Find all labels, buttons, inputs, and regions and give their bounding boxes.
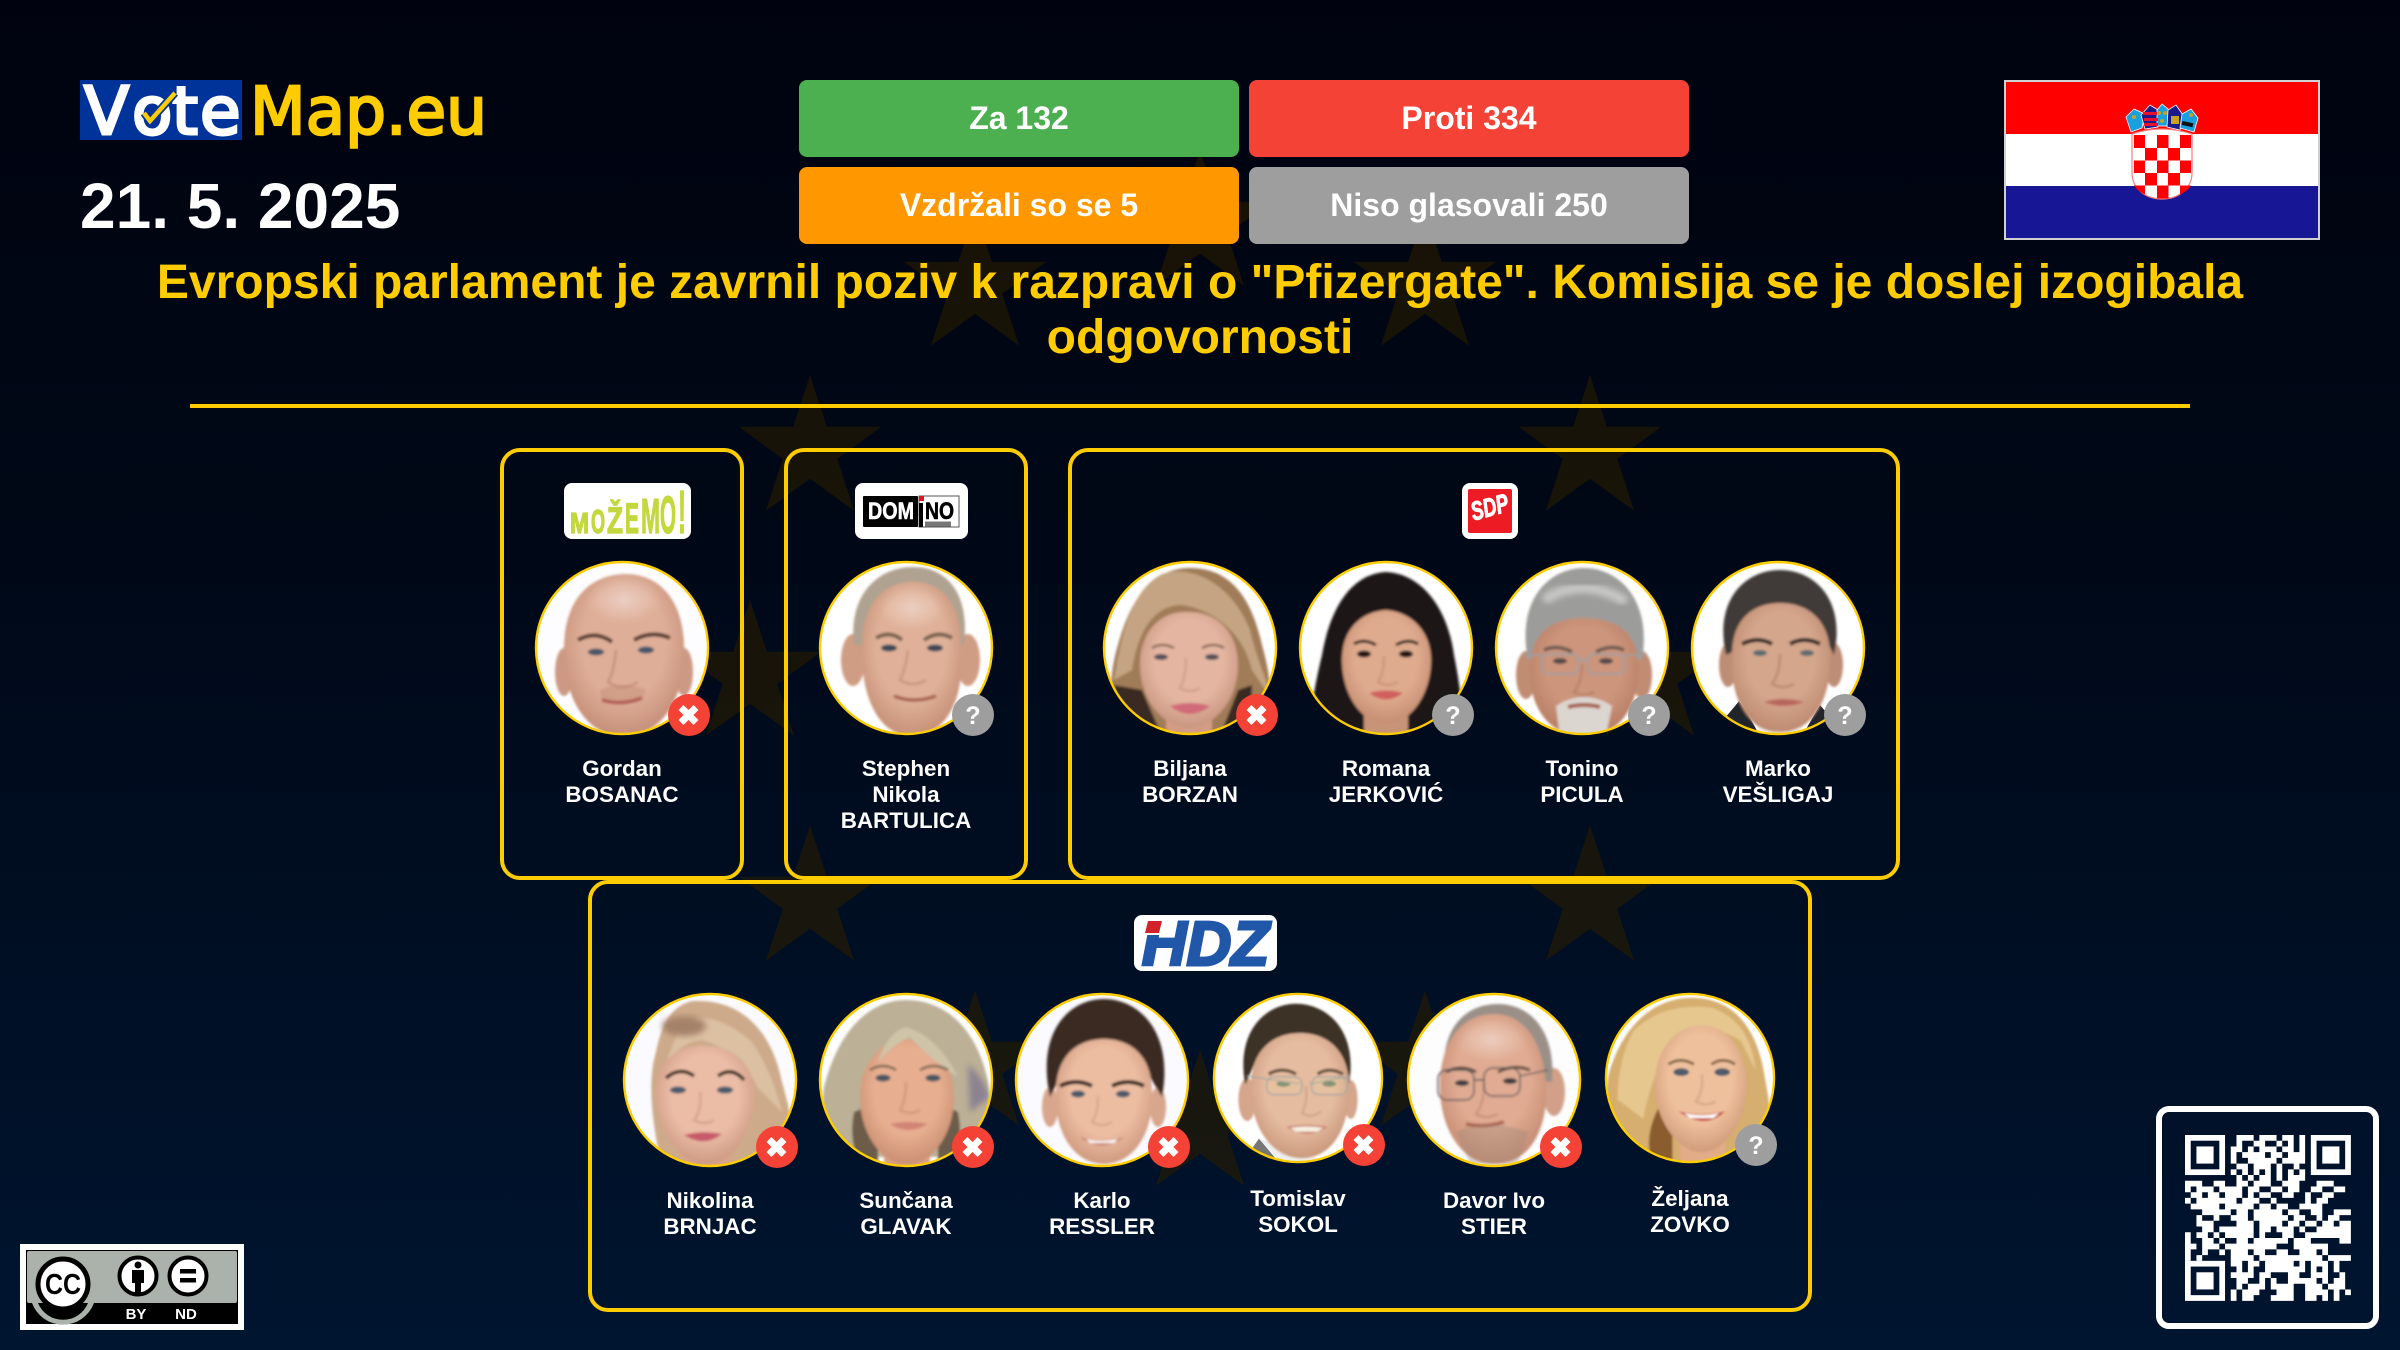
licence badge: CC BY-ND: [20, 1244, 244, 1330]
party logo: Možemo: O: [591, 503, 605, 539]
name: Sunčana: [859, 1188, 953, 1212]
photo: Stephen Nikola Bartulica: [818, 560, 994, 736]
name: Željana: [1651, 1186, 1729, 1210]
vote badge: against: [1343, 1124, 1385, 1166]
name: Tomislav: [1250, 1186, 1346, 1210]
name: PICULA: [1540, 782, 1624, 806]
vote badge: did not vote: ?: [1837, 702, 1853, 730]
vote badge: against: [668, 694, 710, 736]
member: Sunčana Glavak: [818, 992, 994, 1238]
name: [1540, 756, 1624, 806]
name: [1650, 1186, 1730, 1236]
photo: Sunčana Glavak: [818, 992, 994, 1168]
vote badge: against: [952, 1126, 994, 1168]
flag of Croatia: [2004, 80, 2320, 240]
name: [841, 756, 971, 832]
name: [1443, 1188, 1545, 1238]
party logo: Domino: [855, 483, 968, 539]
name: Nikolina: [666, 1188, 754, 1212]
panel: HDZ: [588, 880, 1812, 1312]
title: [157, 256, 2244, 364]
panel: SDP: [1068, 448, 1900, 880]
vote badge: against: [756, 1126, 798, 1168]
vote badge: against: [1540, 1126, 1582, 1168]
panel: DOMINO: [784, 448, 1028, 880]
member: Romana Jerković: [1298, 560, 1474, 806]
name: GLAVAK: [860, 1214, 952, 1238]
photo: Biljana Borzan: [1102, 560, 1278, 736]
member: Biljana Borzan: [1102, 560, 1278, 806]
name: Karlo: [1073, 1188, 1131, 1212]
name: [1049, 1188, 1155, 1238]
member: Tomislav Sokol: [1212, 992, 1385, 1236]
title: odgovornosti: [1047, 311, 1353, 364]
vote badge: did not vote: [952, 694, 994, 736]
name: SOKOL: [1258, 1212, 1338, 1236]
name: Romana: [1342, 756, 1430, 780]
name: [1250, 1186, 1346, 1236]
member: Stephen Nikola Bartulica: [818, 560, 994, 832]
name: [663, 1188, 757, 1238]
logo: VoteMap.eu: [80, 80, 487, 150]
name: BARTULICA: [841, 808, 971, 832]
name: [1142, 756, 1238, 806]
date: 21. 5. 2025: [80, 170, 400, 242]
panel: MOŽEMO: [500, 448, 744, 880]
member: Marko Vešligaj: [1690, 560, 1866, 806]
photo: Tomislav Sokol: [1212, 992, 1384, 1164]
photo: Davor Ivo Stier: [1406, 992, 1582, 1168]
name: VEŠLIGAJ: [1723, 782, 1833, 806]
member: Gordan Bosanac: [534, 560, 710, 806]
licence badge: CC BY-ND: ND: [175, 1306, 197, 1323]
name: [1722, 756, 1833, 806]
vote badge: did not vote: [1432, 694, 1474, 736]
photo: Nikolina Brnjac: [622, 992, 798, 1168]
member: Tonino Picula: [1494, 560, 1670, 806]
name: BORZAN: [1142, 782, 1238, 806]
title: Evropski parlament je zavrnil poziv k razpravi o "Pfizergate". Komisija se je doslej izogibala: [157, 256, 2243, 309]
name: Marko: [1745, 756, 1811, 780]
name: BRNJAC: [663, 1214, 757, 1238]
vote count: abstained: Vzdržali so se 5: [900, 187, 1138, 223]
vote badge: did not vote: ?: [965, 702, 981, 730]
vote badge: did not vote: ?: [1641, 702, 1657, 730]
vote count: for: Za 132: [969, 100, 1069, 136]
photo: Tonino Picula: [1494, 560, 1670, 736]
vote count: did not vote: Niso glasovali 250: [1330, 187, 1608, 223]
vote badge: did not vote: [1735, 1124, 1777, 1166]
name: [565, 756, 679, 806]
party logo: Domino: NO: [925, 498, 954, 525]
photo: Željana Zovko: [1604, 992, 1776, 1164]
name: [859, 1188, 953, 1238]
party logo: Možemo: [564, 483, 691, 539]
name: STIER: [1461, 1214, 1527, 1238]
name: Tonino: [1546, 756, 1618, 780]
name: ZOVKO: [1650, 1212, 1730, 1236]
member: Davor Ivo Stier: [1406, 992, 1582, 1238]
member: Željana Zovko: [1604, 992, 1777, 1236]
vote count: abstained: [799, 167, 1239, 244]
photo: Gordan Bosanac: [534, 560, 710, 736]
vote badge: against: [1236, 694, 1278, 736]
QR code: [2156, 1106, 2379, 1329]
name: JERKOVIĆ: [1329, 782, 1443, 806]
vote badge: did not vote: [1824, 694, 1866, 736]
vote count: did not vote: [1249, 167, 1689, 244]
vote badge: did not vote: ?: [1445, 702, 1461, 730]
name: Davor Ivo: [1443, 1188, 1545, 1212]
licence badge: CC BY-ND: BY: [126, 1306, 146, 1323]
name: [1329, 756, 1443, 806]
name: Biljana: [1153, 756, 1227, 780]
party logo: Domino: DOM: [868, 498, 914, 525]
vote count: against: [1249, 80, 1689, 157]
name: Nikola: [872, 782, 940, 806]
vote badge: against: [1148, 1126, 1190, 1168]
licence badge: CC BY-ND: CC: [45, 1269, 81, 1301]
party logo: SDP: [1462, 483, 1518, 539]
vote count: for: [799, 80, 1239, 157]
name: RESSLER: [1049, 1214, 1155, 1238]
member: Nikolina Brnjac: [622, 992, 798, 1238]
name: BOSANAC: [565, 782, 679, 806]
photo: Karlo Ressler: [1014, 992, 1190, 1168]
vote badge: did not vote: ?: [1748, 1132, 1764, 1160]
photo: Marko Vešligaj: [1690, 560, 1866, 736]
vote count: against: Proti 334: [1401, 100, 1537, 136]
member: Karlo Ressler: [1014, 992, 1190, 1238]
vote badge: did not vote: [1628, 694, 1670, 736]
name: Gordan: [582, 756, 662, 780]
name: Stephen: [862, 756, 950, 780]
photo: Romana Jerković: [1298, 560, 1474, 736]
